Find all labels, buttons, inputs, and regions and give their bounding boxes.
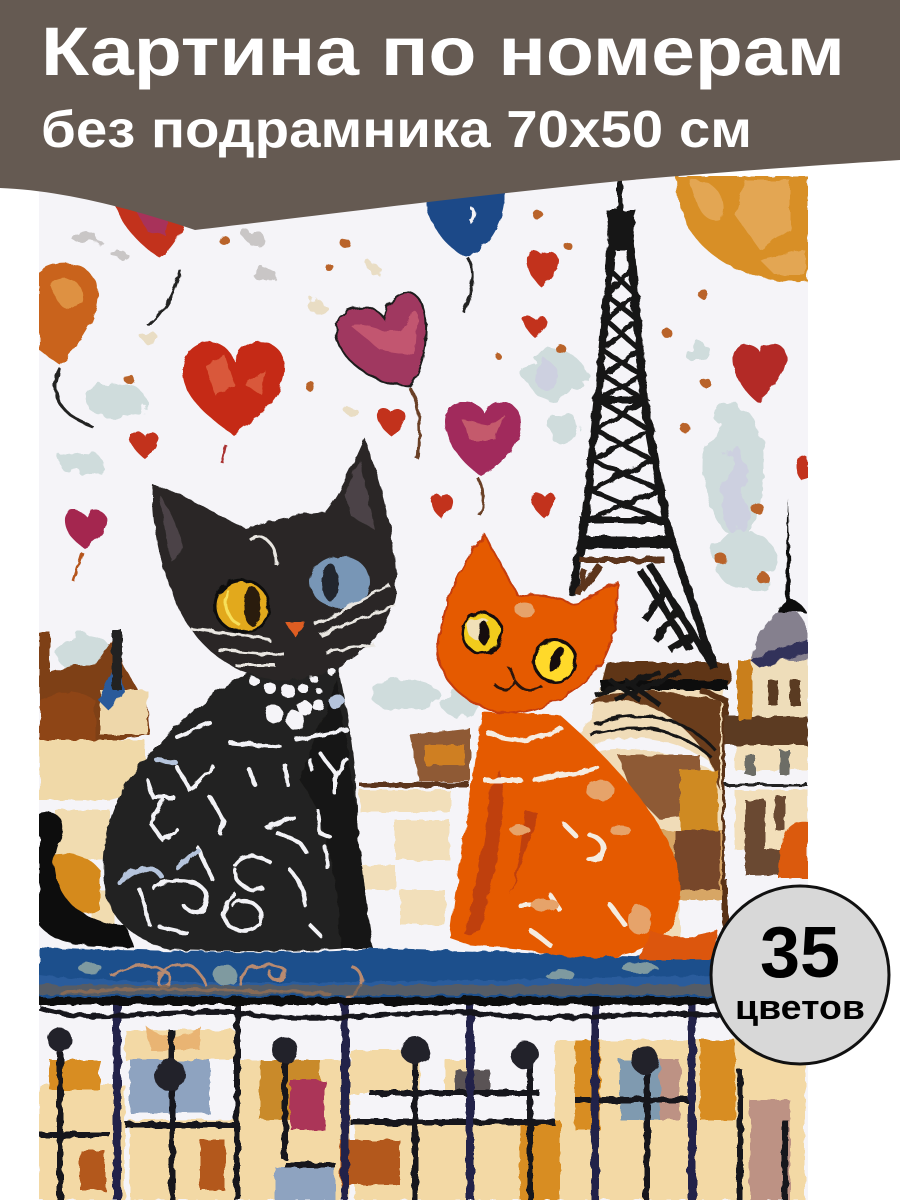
mouth	[494, 668, 542, 690]
small hearts	[130, 251, 808, 518]
right eye	[534, 640, 576, 682]
yellow eye	[215, 580, 269, 632]
head	[152, 438, 396, 680]
blue eye	[310, 556, 370, 608]
subtitle: без подрамника 70х50 см	[41, 101, 752, 159]
black cat	[39, 438, 396, 951]
balloon: magenta heart small	[445, 402, 521, 516]
body	[103, 662, 373, 951]
cat tail	[640, 930, 718, 960]
orange flecks	[124, 210, 769, 584]
balloon: right heart	[733, 344, 786, 402]
background paint flecks	[57, 232, 775, 717]
nose	[285, 622, 305, 637]
railing and lower street	[39, 1005, 808, 1200]
necklace	[250, 668, 345, 729]
Eiffel tower	[572, 180, 715, 758]
white ornaments	[140, 723, 347, 935]
cat head	[438, 535, 618, 713]
badge number: 35	[760, 913, 840, 993]
right-hand buildings	[725, 715, 808, 880]
whiskers	[190, 585, 395, 655]
title banner	[0, 0, 900, 230]
painting panel	[39, 176, 808, 1200]
city buildings background	[39, 498, 808, 945]
balloon: magenta heart large	[336, 292, 426, 460]
balloon: blue	[425, 190, 505, 312]
pale paint marks	[510, 603, 652, 935]
tower base buildings	[560, 662, 732, 945]
cat in the background	[778, 822, 808, 878]
collar and marks	[485, 728, 625, 945]
blue ledge	[39, 947, 720, 1005]
tail	[39, 812, 135, 948]
balloon: large red heart	[182, 341, 285, 463]
badge label: цветов	[735, 989, 865, 1027]
domed building	[738, 498, 808, 720]
balloons	[39, 190, 808, 581]
balloon: orange	[39, 263, 98, 426]
moon	[676, 176, 808, 282]
orange cat	[438, 535, 718, 960]
balloon: top red	[115, 205, 188, 326]
badge: 35 colours	[711, 886, 889, 1064]
cat body	[450, 712, 680, 958]
left eye	[462, 613, 502, 653]
mouth markings	[235, 537, 276, 665]
title: Картина по номерам	[41, 13, 845, 90]
balloon: small left heart	[65, 510, 107, 581]
